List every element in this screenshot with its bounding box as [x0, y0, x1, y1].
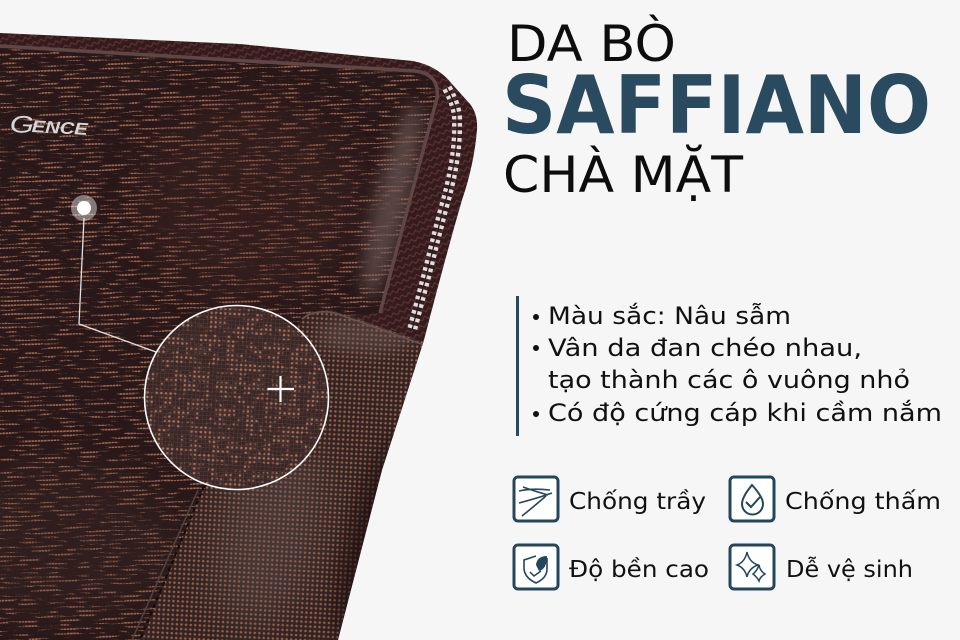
- title: CHÀ MẶT: [503, 144, 743, 204]
- benefit: easy to clean: Dễ vệ sinh: [786, 555, 913, 583]
- stitching on the flap: [302, 312, 424, 345]
- marker dot: [71, 195, 97, 221]
- feature list: tạo thành các ô vuông nhỏ: [548, 366, 910, 394]
- brand logo: G: [9, 111, 35, 139]
- benefit: scratch resistant: Chống trầy: [569, 489, 706, 515]
- callout: magnified leather texture: [71, 195, 340, 495]
- feature list: Có độ cứng cáp khi cầm nắm: [548, 398, 942, 427]
- plus icon: [268, 376, 294, 402]
- benefit: waterproof: Chống thấm: [785, 489, 941, 515]
- zipper teeth: [412, 88, 457, 330]
- feature list: Màu sắc: Nâu sẫm: [548, 301, 791, 330]
- title: SAFFIANO: [502, 59, 931, 152]
- benefit: durable: Độ bền cao: [569, 557, 709, 583]
- wallet photo: [0, 0, 500, 640]
- leader line: [79, 218, 156, 352]
- feature list: [516, 296, 942, 436]
- zipper piping: [0, 46, 437, 313]
- benefit: scratch resistant: [514, 477, 706, 521]
- benefit: waterproof: [730, 477, 941, 521]
- brand logo: ENCE: [31, 117, 89, 139]
- feature list: Vân da đan chéo nhau,: [548, 334, 862, 362]
- brand logo: [9, 111, 89, 142]
- benefit: easy to clean: [730, 545, 913, 589]
- benefit: durable: [514, 545, 709, 589]
- title: DA BÒ: [507, 14, 676, 73]
- title: [502, 14, 931, 204]
